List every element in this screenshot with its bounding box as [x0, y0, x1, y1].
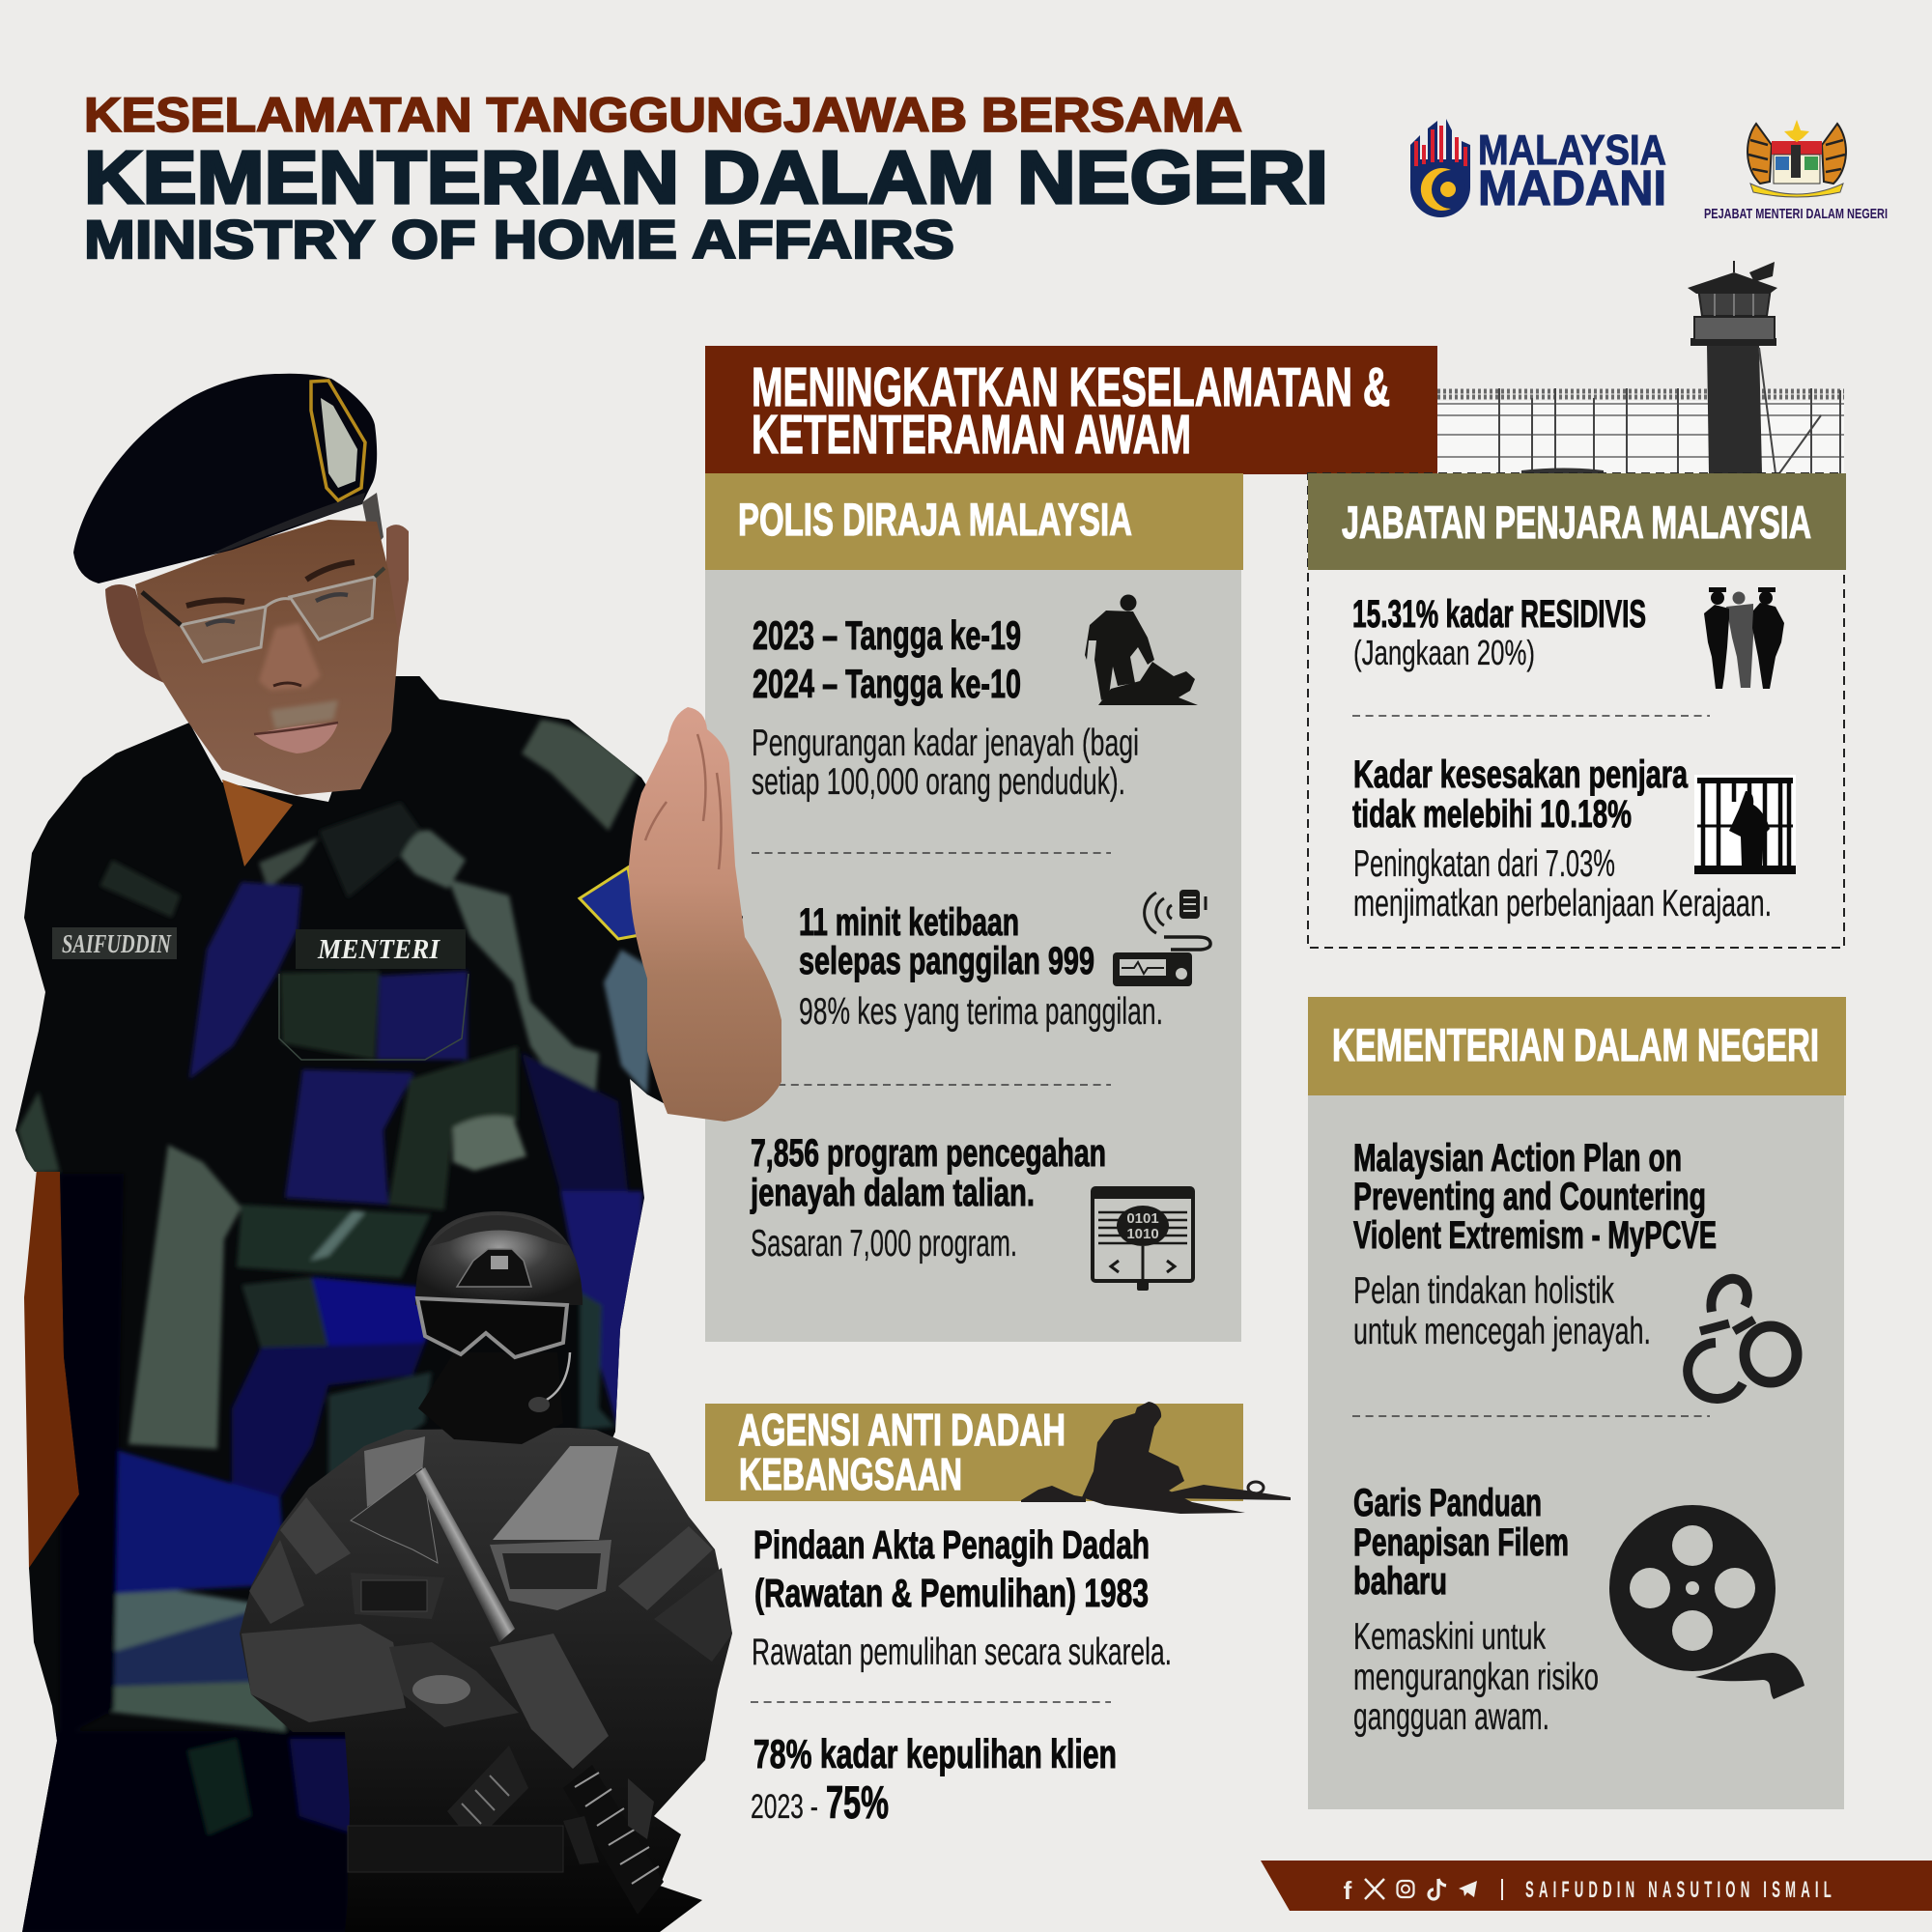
text: prison overcrowding: Peningkatan dari 7.03%: [1353, 843, 1615, 885]
rifle tube: [415, 1467, 515, 1642]
name tag: Saifuddin: SAIFUDDIN: [62, 929, 172, 958]
text: response time: selepas panggilan 999: [799, 940, 1094, 982]
soldier body: [240, 1428, 732, 1932]
text: online prevention programmes: jenayah dalam talian.: [750, 1172, 1035, 1214]
panel: Kementerian Dalam Negeri: [1308, 997, 1846, 1809]
text: MyPCVE: Malaysian Action Plan on: [1353, 1137, 1682, 1179]
heading: Jabatan Penjara Malaysia: [1308, 473, 1846, 570]
text: film censorship guidelines: Garis Panduan: [1353, 1482, 1542, 1524]
icon: handcuffs: [1688, 1279, 1797, 1399]
text: prison overcrowding: Kadar kesesakan penjara: [1353, 753, 1689, 796]
icon: code window: 1010: [1126, 1226, 1159, 1242]
icon: prisoner behind bars: [1694, 775, 1796, 874]
text: film censorship guidelines: baharu: [1353, 1560, 1447, 1603]
heading: Kementerian Dalam Negeri: [1308, 997, 1846, 1095]
text: film censorship guidelines: Kemaskini untuk: [1353, 1616, 1546, 1658]
icon: officer arresting suspect: [1085, 595, 1198, 705]
figure: minister in camouflage uniform: [0, 374, 781, 1932]
text: film censorship guidelines: Penapisan Filem: [1353, 1521, 1569, 1564]
text: recidivism rate: 15.31% kadar RESIDIVIS: [1352, 593, 1646, 636]
text: film censorship guidelines: gangguan awam.: [1353, 1696, 1549, 1738]
text: drug act amendment: Pindaan Akta Penagih Dadah: [753, 1522, 1150, 1567]
nose and mouth: [254, 623, 338, 753]
text: MyPCVE: Violent Extremism - MyPCVE: [1353, 1214, 1717, 1257]
eyebrows: [186, 562, 355, 606]
raised hand: [629, 707, 781, 1122]
text: MyPCVE: [1353, 1137, 1717, 1352]
text: drug act amendment: Rawatan pemulihan secara sukarela.: [752, 1632, 1172, 1673]
text: prison overcrowding: [1352, 753, 1772, 924]
text: client recovery rate: 2023 -: [751, 1788, 818, 1826]
sleeve patch: [580, 867, 639, 939]
text: recidivism rate: (Jangkaan 20%): [1353, 633, 1535, 672]
panel: section banner: [705, 346, 1437, 474]
text: film censorship guidelines: [1353, 1482, 1599, 1738]
title block: [84, 88, 1328, 270]
icon: escorted prisoner: [1704, 587, 1784, 689]
text: recidivism rate: [1352, 593, 1646, 672]
heading: Agensi Anti Dadah Kebangsaan: [705, 1404, 1243, 1501]
text: prison overcrowding: tidak melebihi 10.18%: [1352, 793, 1632, 836]
text: MyPCVE: Preventing and Countering: [1353, 1176, 1706, 1218]
helmet: [415, 1211, 582, 1305]
heading: Agensi Anti Dadah Kebangsaan: AGENSI ANTI DADAH: [738, 1405, 1065, 1455]
text: film censorship guidelines: mengurangkan risiko: [1353, 1657, 1599, 1698]
text: crime ranking: [752, 612, 1139, 803]
figure: tactical soldier: [240, 1211, 732, 1932]
social icons: [1344, 1876, 1477, 1905]
text: online prevention programmes: [750, 1132, 1106, 1264]
text: crime ranking: setiap 100,000 orang penduduk).: [752, 761, 1125, 803]
panel: Jabatan Penjara Malaysia: [1308, 473, 1846, 948]
name tag: Saifuddin: [52, 927, 177, 959]
text: online prevention programmes: 7,856 program pencegahan: [751, 1132, 1106, 1175]
panel: section banner: KETENTERAMAN AWAM: [752, 404, 1191, 466]
headset mic: [528, 1352, 570, 1412]
panel: section banner: MENINGKATKAN KESELAMATAN &: [752, 356, 1390, 418]
goggles: [417, 1298, 567, 1357]
text: client recovery rate: [751, 1731, 1117, 1828]
beret: [73, 374, 377, 583]
name tag: Menteri: [296, 929, 466, 969]
text: crime ranking: Pengurangan kadar jenayah (bagi: [752, 723, 1139, 764]
rifle magazine: [447, 1746, 528, 1844]
social icons: f: [1344, 1876, 1352, 1905]
text: drug act amendment: (Rawatan & Pemulihan) 1983: [754, 1571, 1149, 1615]
logo: coat of arms and office name: [1704, 120, 1888, 222]
glasses: [142, 568, 384, 662]
logo: Malaysia Madani: MADANI: [1478, 160, 1666, 215]
text: response time: [799, 901, 1163, 1033]
logo: Malaysia Madani: [1410, 119, 1666, 217]
icon: code window: [1093, 1188, 1193, 1291]
neck: [222, 780, 293, 867]
gloves: [389, 1642, 654, 1864]
panel: Agensi Anti Dadah Kebangsaan: [705, 1402, 1291, 1828]
text: response time: 98% kes yang terima panggilan.: [799, 991, 1163, 1033]
heading: Agensi Anti Dadah Kebangsaan: KEBANGSAAN: [739, 1449, 962, 1499]
illustration: prison fence and watchtower: [1437, 261, 1844, 473]
shirt pocket outline: [279, 974, 469, 1060]
face: [135, 520, 399, 795]
beret badge: [311, 381, 365, 500]
name tag: Menteri: MENTERI: [317, 934, 441, 965]
icon: police radio: [1113, 890, 1210, 986]
logo: Malaysia Madani: MALAYSIA: [1478, 127, 1666, 174]
title: ministry English name: MINISTRY OF HOME AFFAIRS: [84, 209, 954, 270]
text: client recovery rate: 78% kadar kepulihan klien: [753, 1731, 1117, 1776]
panel: Polis Diraja Malaysia: [705, 473, 1243, 1342]
ear: left: [105, 584, 164, 683]
beret band: [208, 493, 365, 555]
vest straps and pouches: [249, 1436, 732, 1662]
text: crime ranking: 2023 – Tangga ke-19: [753, 612, 1021, 658]
bare left arm: [24, 1169, 81, 1570]
text: MyPCVE: untuk mencegah jenayah.: [1353, 1311, 1651, 1352]
ear: right: [386, 525, 409, 638]
text: drug act amendment: [752, 1522, 1172, 1673]
footer name: SAIFUDDIN NASUTION ISMAIL: [1525, 1877, 1832, 1903]
icon: film reel: [1609, 1505, 1804, 1699]
icon: code window: 0101: [1126, 1210, 1159, 1227]
text: response time: 11 minit ketibaan: [799, 901, 1019, 944]
left forearm sleeve: [242, 1624, 406, 1722]
text: crime ranking: 2024 – Tangga ke-10: [753, 661, 1021, 706]
icon: addict in chains: [1021, 1402, 1291, 1514]
rifle stock: [351, 1467, 438, 1563]
rifle receiver: [490, 1634, 609, 1769]
heading: Polis Diraja Malaysia: POLIS DIRAJA MALAYSIA: [738, 494, 1132, 545]
uniform body with camouflage: [0, 676, 773, 1932]
text: MyPCVE: Pelan tindakan holistik: [1353, 1270, 1614, 1312]
text: client recovery rate: 75%: [826, 1776, 889, 1828]
heading: Polis Diraja Malaysia: [705, 473, 1243, 570]
rifle handguard: [563, 1765, 664, 1915]
title: ministry Malay name: KEMENTERIAN DALAM NEGERI: [84, 136, 1328, 219]
title: tagline: KESELAMATAN TANGGUNGJAWAB BERSAMA: [84, 88, 1242, 142]
hood and mask: [418, 1352, 563, 1444]
eyes: [206, 594, 348, 625]
hair at the temple: [362, 493, 384, 551]
footer bar: [1261, 1861, 1932, 1911]
text: online prevention programmes: Sasaran 7,000 program.: [751, 1223, 1017, 1264]
belt: [348, 1826, 563, 1872]
